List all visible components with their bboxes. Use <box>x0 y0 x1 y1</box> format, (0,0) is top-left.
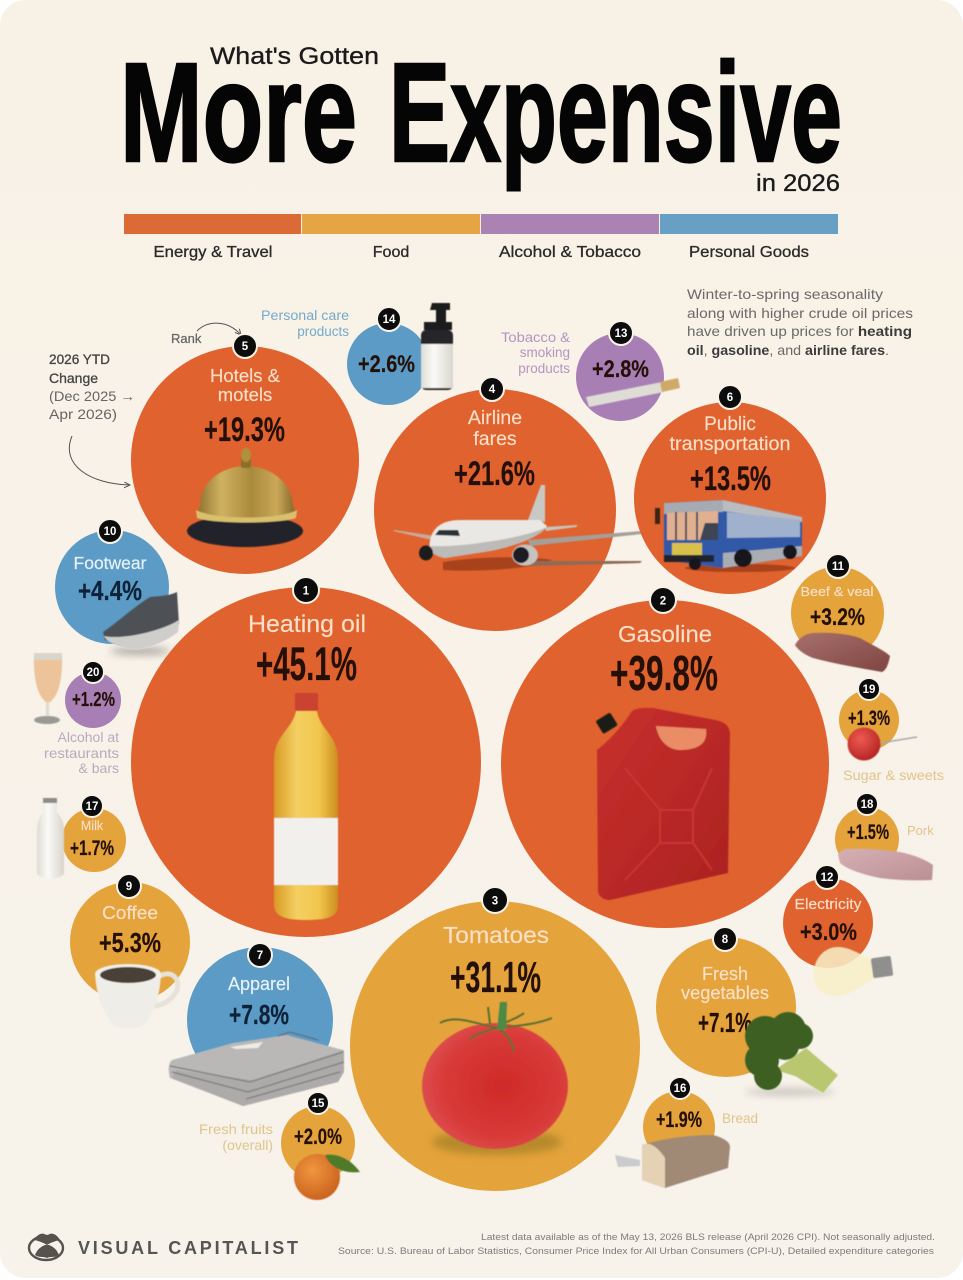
bubble 12: electricity: Electricity <box>794 897 862 913</box>
rank badges <box>81 307 880 1114</box>
bubble 2: gasoline: Gasoline <box>618 621 712 647</box>
icon: orange <box>294 1154 360 1200</box>
bubble 5: hotels and motels: Hotels & <box>210 365 281 386</box>
bubble 17: milk: Milk <box>81 819 104 833</box>
bubble 4: airline fares: +21.6% <box>454 455 535 493</box>
bubble 11: beef and veal: +3.2% <box>810 604 865 631</box>
bubble 7: apparel <box>169 947 344 1106</box>
bubble 7: apparel: Apparel <box>228 974 290 994</box>
icon: coffee cup <box>95 964 178 1028</box>
label: fresh fruits <box>199 1121 273 1153</box>
bubble 5: hotels and motels <box>131 346 359 574</box>
icon: airplane <box>393 485 642 571</box>
bubble 6: public transportation: transportation <box>670 434 790 455</box>
bubble 6: public transportation <box>634 402 826 594</box>
bubble 19: sugar and sweets <box>839 690 917 760</box>
icon: pork <box>838 849 933 880</box>
bubble 1: heating oil: Heating oil <box>248 611 366 638</box>
bubble 2: gasoline <box>501 600 829 928</box>
annotation: seasonality note: have driven up prices for heating <box>687 323 912 339</box>
annotation: seasonality note: Winter-to-spring seasonality <box>687 286 883 302</box>
icon: shoe <box>103 592 179 655</box>
bubble 18: pork: +1.5% <box>847 821 889 844</box>
rank badges: 19 <box>863 684 875 696</box>
icon: oil bottle <box>274 693 338 920</box>
rank badges: 4 <box>489 384 496 396</box>
label: alcohol: Alcohol at <box>58 729 119 745</box>
bubble 6: public transportation: +13.5% <box>690 460 771 498</box>
bubble 10: footwear <box>55 530 179 655</box>
bubble 9: coffee <box>70 882 190 1028</box>
bubble 3: tomatoes: Tomatoes <box>443 922 549 948</box>
annotation: YTD change key: Apr 2026) <box>49 406 117 422</box>
label: tobacco: Tobacco & <box>501 330 570 345</box>
icon: milk bottle <box>37 798 64 878</box>
bubble 4: airline fares: Airline <box>468 407 522 429</box>
bubble 12: electricity: +3.0% <box>800 919 857 946</box>
label: tobacco: products <box>518 361 570 376</box>
label: alcohol: restaurants <box>44 745 119 761</box>
annotation: YTD change key: (Dec 2025 → <box>49 388 135 404</box>
bubble 7: apparel: +7.8% <box>229 999 289 1030</box>
bubble 8: fresh vegetables: vegetables <box>681 983 769 1003</box>
title: What's Gotten <box>210 43 379 70</box>
rank badges: 11 <box>832 561 845 573</box>
annotation: rank key: Rank <box>171 331 202 346</box>
source note <box>338 1232 935 1257</box>
label: fresh fruits: Fresh fruits <box>199 1121 273 1137</box>
bubble 15: fresh fruits: +2.0% <box>294 1124 342 1149</box>
label: pork: Pork <box>907 823 934 838</box>
bubble 11: beef and veal: Beef & veal <box>800 584 874 599</box>
bubble 18: pork <box>835 807 933 880</box>
source note: Source: U.S. Bureau of Labor Statistics, Consumer Price Index for All Urban Consumers (CPI-U), Detailed expenditure categories <box>338 1246 934 1257</box>
bubble 1: heating oil: +45.1% <box>256 637 357 690</box>
annotation: YTD change key: 2026 YTD <box>49 351 110 367</box>
bubble 2: gasoline: +39.8% <box>610 647 718 701</box>
icon: broccoli <box>745 1012 838 1096</box>
rank badges: 1 <box>303 586 310 598</box>
rank badges: 15 <box>312 1098 325 1110</box>
icon: light bulb <box>814 947 893 996</box>
annotation: seasonality note: along with higher crude oil prices <box>687 305 913 321</box>
rank badges: 13 <box>615 328 627 340</box>
legend: categories: Food <box>373 244 409 261</box>
title: in 2026 <box>756 170 840 197</box>
logo: Visual Capitalist: VISUAL CAPITALIST <box>78 1238 298 1258</box>
icon: folded clothes <box>169 1032 344 1106</box>
rank badges: 18 <box>861 799 874 811</box>
bubble 6: public transportation: Public <box>704 414 756 435</box>
rank badges: 2 <box>660 596 666 608</box>
bubble 10: footwear: Footwear <box>74 553 147 573</box>
bubble 10: footwear: +4.4% <box>78 575 142 606</box>
label: alcohol <box>44 729 119 776</box>
bubble 13: tobacco: +2.8% <box>592 356 649 383</box>
annotation: seasonality note: oil, gasoline, and airline fares. <box>687 342 889 358</box>
label: tobacco: smoking <box>520 345 570 360</box>
bubble 16: bread: +1.9% <box>656 1107 702 1132</box>
label: personal care: products <box>297 324 349 339</box>
icon: lollipop <box>848 728 917 760</box>
annotation: seasonality note <box>687 286 913 358</box>
legend: categories: Personal Goods <box>689 244 809 261</box>
bubble 20: alcohol at restaurants: +1.2% <box>72 689 115 711</box>
bubble 14: personal care products <box>347 303 453 405</box>
bubble 20: alcohol at restaurants <box>65 672 121 728</box>
bubble 3: tomatoes <box>350 901 640 1191</box>
bubble 1: heating oil <box>131 587 481 937</box>
bubble 16: bread <box>615 1091 730 1188</box>
bubble 15: fresh fruits <box>281 1106 360 1200</box>
label: alcohol: & bars <box>79 760 119 776</box>
icon: bus <box>655 500 802 572</box>
title: More <box>120 33 357 191</box>
bubble 4: airline fares: fares <box>473 428 517 450</box>
legend: categories: Alcohol & Tobacco <box>499 244 641 261</box>
rank badges: 14 <box>383 314 396 326</box>
bubble 8: fresh vegetables: +7.1% <box>698 1007 752 1038</box>
legend: categories <box>124 214 838 261</box>
icon: pump bottle <box>421 303 453 390</box>
annotation: YTD change key <box>49 351 135 485</box>
bubble 3: tomatoes: +31.1% <box>450 953 541 1002</box>
label: personal care: Personal care <box>261 308 349 323</box>
rank badges: 16 <box>674 1083 686 1095</box>
label: personal care <box>261 308 349 339</box>
bubble 5: hotels and motels: motels <box>218 384 272 405</box>
bubble 9: coffee: +5.3% <box>99 927 161 958</box>
icon: bread loaf <box>615 1135 730 1188</box>
bubble 8: fresh vegetables: Fresh <box>702 964 748 984</box>
annotation: YTD change key: Change <box>49 370 98 386</box>
title <box>120 33 842 197</box>
bubble 19: sugar and sweets: +1.3% <box>848 707 890 730</box>
icon: tomato <box>422 1002 568 1155</box>
legend: categories: Energy & Travel <box>154 244 272 261</box>
bubble 12: electricity <box>783 878 893 996</box>
rank badges: 9 <box>126 881 132 893</box>
icon: service bell <box>187 448 303 547</box>
bubble 17: milk: +1.7% <box>70 837 114 860</box>
bubble 5: hotels and motels: +19.3% <box>204 411 285 449</box>
logo: Visual Capitalist <box>29 1234 298 1260</box>
bubble 17: milk <box>62 808 126 872</box>
label: tobacco <box>501 330 570 376</box>
rank badges: 6 <box>727 392 733 404</box>
bubble 4: airline fares <box>374 389 642 631</box>
rank badges: 20 <box>87 667 99 679</box>
label: sugar and sweets: Sugar & sweets <box>843 768 944 783</box>
label: bread: Bread <box>722 1111 758 1126</box>
icon: beer glass <box>34 653 62 724</box>
rank badges: 5 <box>242 341 249 353</box>
bubble 13: tobacco <box>576 333 680 421</box>
rank badges: 17 <box>86 801 98 813</box>
rank badges: 3 <box>492 896 498 908</box>
rank badges: 7 <box>257 950 263 962</box>
icon: beef <box>795 633 890 672</box>
bubble 11: beef and veal <box>791 566 890 672</box>
annotation: rank key <box>171 323 241 346</box>
icon: cigarette <box>586 378 680 407</box>
source note: Latest data available as of the May 13, 2026 BLS release (April 2026 CPI). Not seasonally adjusted. <box>481 1232 935 1243</box>
bubble 9: coffee: Coffee <box>102 903 158 923</box>
label: fresh fruits: (overall) <box>222 1137 273 1153</box>
bubble 8: fresh vegetables <box>656 937 838 1096</box>
bubble 14: personal care products: +2.6% <box>358 351 415 378</box>
icon: jerry can <box>596 708 730 900</box>
rank badges: 10 <box>104 526 116 538</box>
rank badges: 8 <box>722 934 729 946</box>
rank badges: 12 <box>821 872 833 884</box>
